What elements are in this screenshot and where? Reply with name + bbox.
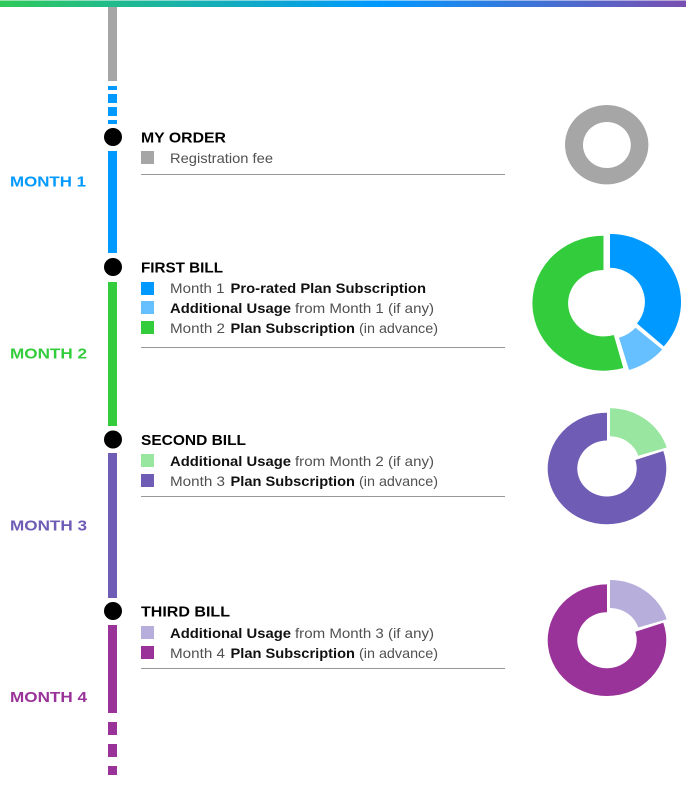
month 4 label: MONTH 4 xyxy=(10,689,88,706)
legend text: month 4 plan: Plan Subscription xyxy=(230,645,355,661)
donut slice: month 1 pro-rated xyxy=(610,234,681,346)
timeline dot: third bill xyxy=(104,602,122,620)
panel: first bill xyxy=(141,260,505,348)
donut chart: my order xyxy=(565,105,648,184)
timeline dot: second bill xyxy=(104,430,122,448)
legend text: month 4 plan xyxy=(170,645,438,661)
legend text: additional usage month 2: from Month 2 (if any) xyxy=(295,453,434,469)
panel: my order xyxy=(141,130,505,175)
heading: third bill: THIRD BILL xyxy=(141,604,230,620)
donut slice: additional usage month 3 xyxy=(610,580,667,628)
legend swatch: additional usage month 1 xyxy=(141,301,154,314)
timeline segment: before order xyxy=(108,7,117,81)
timeline segment: month 4 xyxy=(108,625,117,775)
donut slice: additional usage month 2 xyxy=(610,408,667,456)
timeline xyxy=(104,7,122,775)
timeline segment: month 2 xyxy=(108,282,117,426)
donut chart: second bill xyxy=(548,408,667,524)
timeline segment: month 1 xyxy=(108,151,117,253)
legend text: month 4 plan: (in advance) xyxy=(359,645,438,661)
legend text: additional usage month 1: Additional Usage xyxy=(170,300,291,316)
top gradient bar xyxy=(0,0,686,7)
heading: second bill: SECOND BILL xyxy=(141,432,246,449)
donut chart: first bill xyxy=(532,234,681,371)
legend text: month 3 plan: (in advance) xyxy=(359,473,438,489)
legend swatch: additional usage month 3 xyxy=(141,626,154,639)
legend text: additional usage month 3: Additional Usage xyxy=(170,625,291,641)
legend swatch: registration fee xyxy=(141,151,154,164)
timeline segment: month 3 xyxy=(108,453,117,598)
legend text: additional usage month 3 xyxy=(170,625,434,641)
legend text: month 1 pro-rated: Pro-rated Plan Subscription xyxy=(230,280,426,296)
legend text: additional usage month 2: Additional Usage xyxy=(170,453,291,469)
month 3 label: MONTH 3 xyxy=(10,518,87,534)
legend text: month 2 plan: Month 2 xyxy=(170,320,225,336)
legend swatch: month 2 plan xyxy=(141,321,154,334)
legend text: month 4 plan: Month 4 xyxy=(170,645,225,661)
legend text: additional usage month 2 xyxy=(170,453,434,469)
donut slice: month 3 plan xyxy=(548,413,666,524)
legend text: month 1 pro-rated: Month 1 xyxy=(170,280,225,296)
legend swatch: month 1 pro-rated xyxy=(141,282,154,295)
panel: second bill xyxy=(141,432,505,497)
legend swatch: additional usage month 2 xyxy=(141,454,154,467)
legend text: month 2 plan: Plan Subscription xyxy=(230,320,355,336)
legend text: additional usage month 3: from Month 3 (if any) xyxy=(295,625,434,641)
legend text: month 2 plan: (in advance) xyxy=(359,320,438,336)
month 1 label: MONTH 1 xyxy=(10,174,86,190)
legend text: month 2 plan xyxy=(170,320,438,336)
legend text: month 3 plan: Month 3 xyxy=(170,473,225,489)
legend text: additional usage month 1: from Month 1 (if any) xyxy=(295,300,434,316)
donut slice: additional usage month 1 xyxy=(619,328,662,370)
legend text: additional usage month 1 xyxy=(170,300,434,316)
timeline segment: dashes before order xyxy=(108,86,117,124)
panel: third bill xyxy=(141,604,505,669)
donut chart: third bill xyxy=(548,580,667,696)
month 2 label: MONTH 2 xyxy=(10,346,87,362)
legend text: month 3 plan: Plan Subscription xyxy=(230,473,355,489)
legend text: month 3 plan xyxy=(170,473,438,489)
timeline dot: my order xyxy=(104,128,122,146)
timeline dot: first bill xyxy=(104,258,122,276)
legend swatch: month 3 plan xyxy=(141,474,154,487)
legend text: registration fee: Registration fee xyxy=(170,150,273,166)
heading: my order: MY ORDER xyxy=(141,130,226,146)
donut slice: month 2 plan xyxy=(532,236,623,371)
donut slice: month 4 plan xyxy=(548,584,666,696)
legend swatch: month 4 plan xyxy=(141,646,154,659)
heading: first bill: FIRST BILL xyxy=(141,260,223,276)
